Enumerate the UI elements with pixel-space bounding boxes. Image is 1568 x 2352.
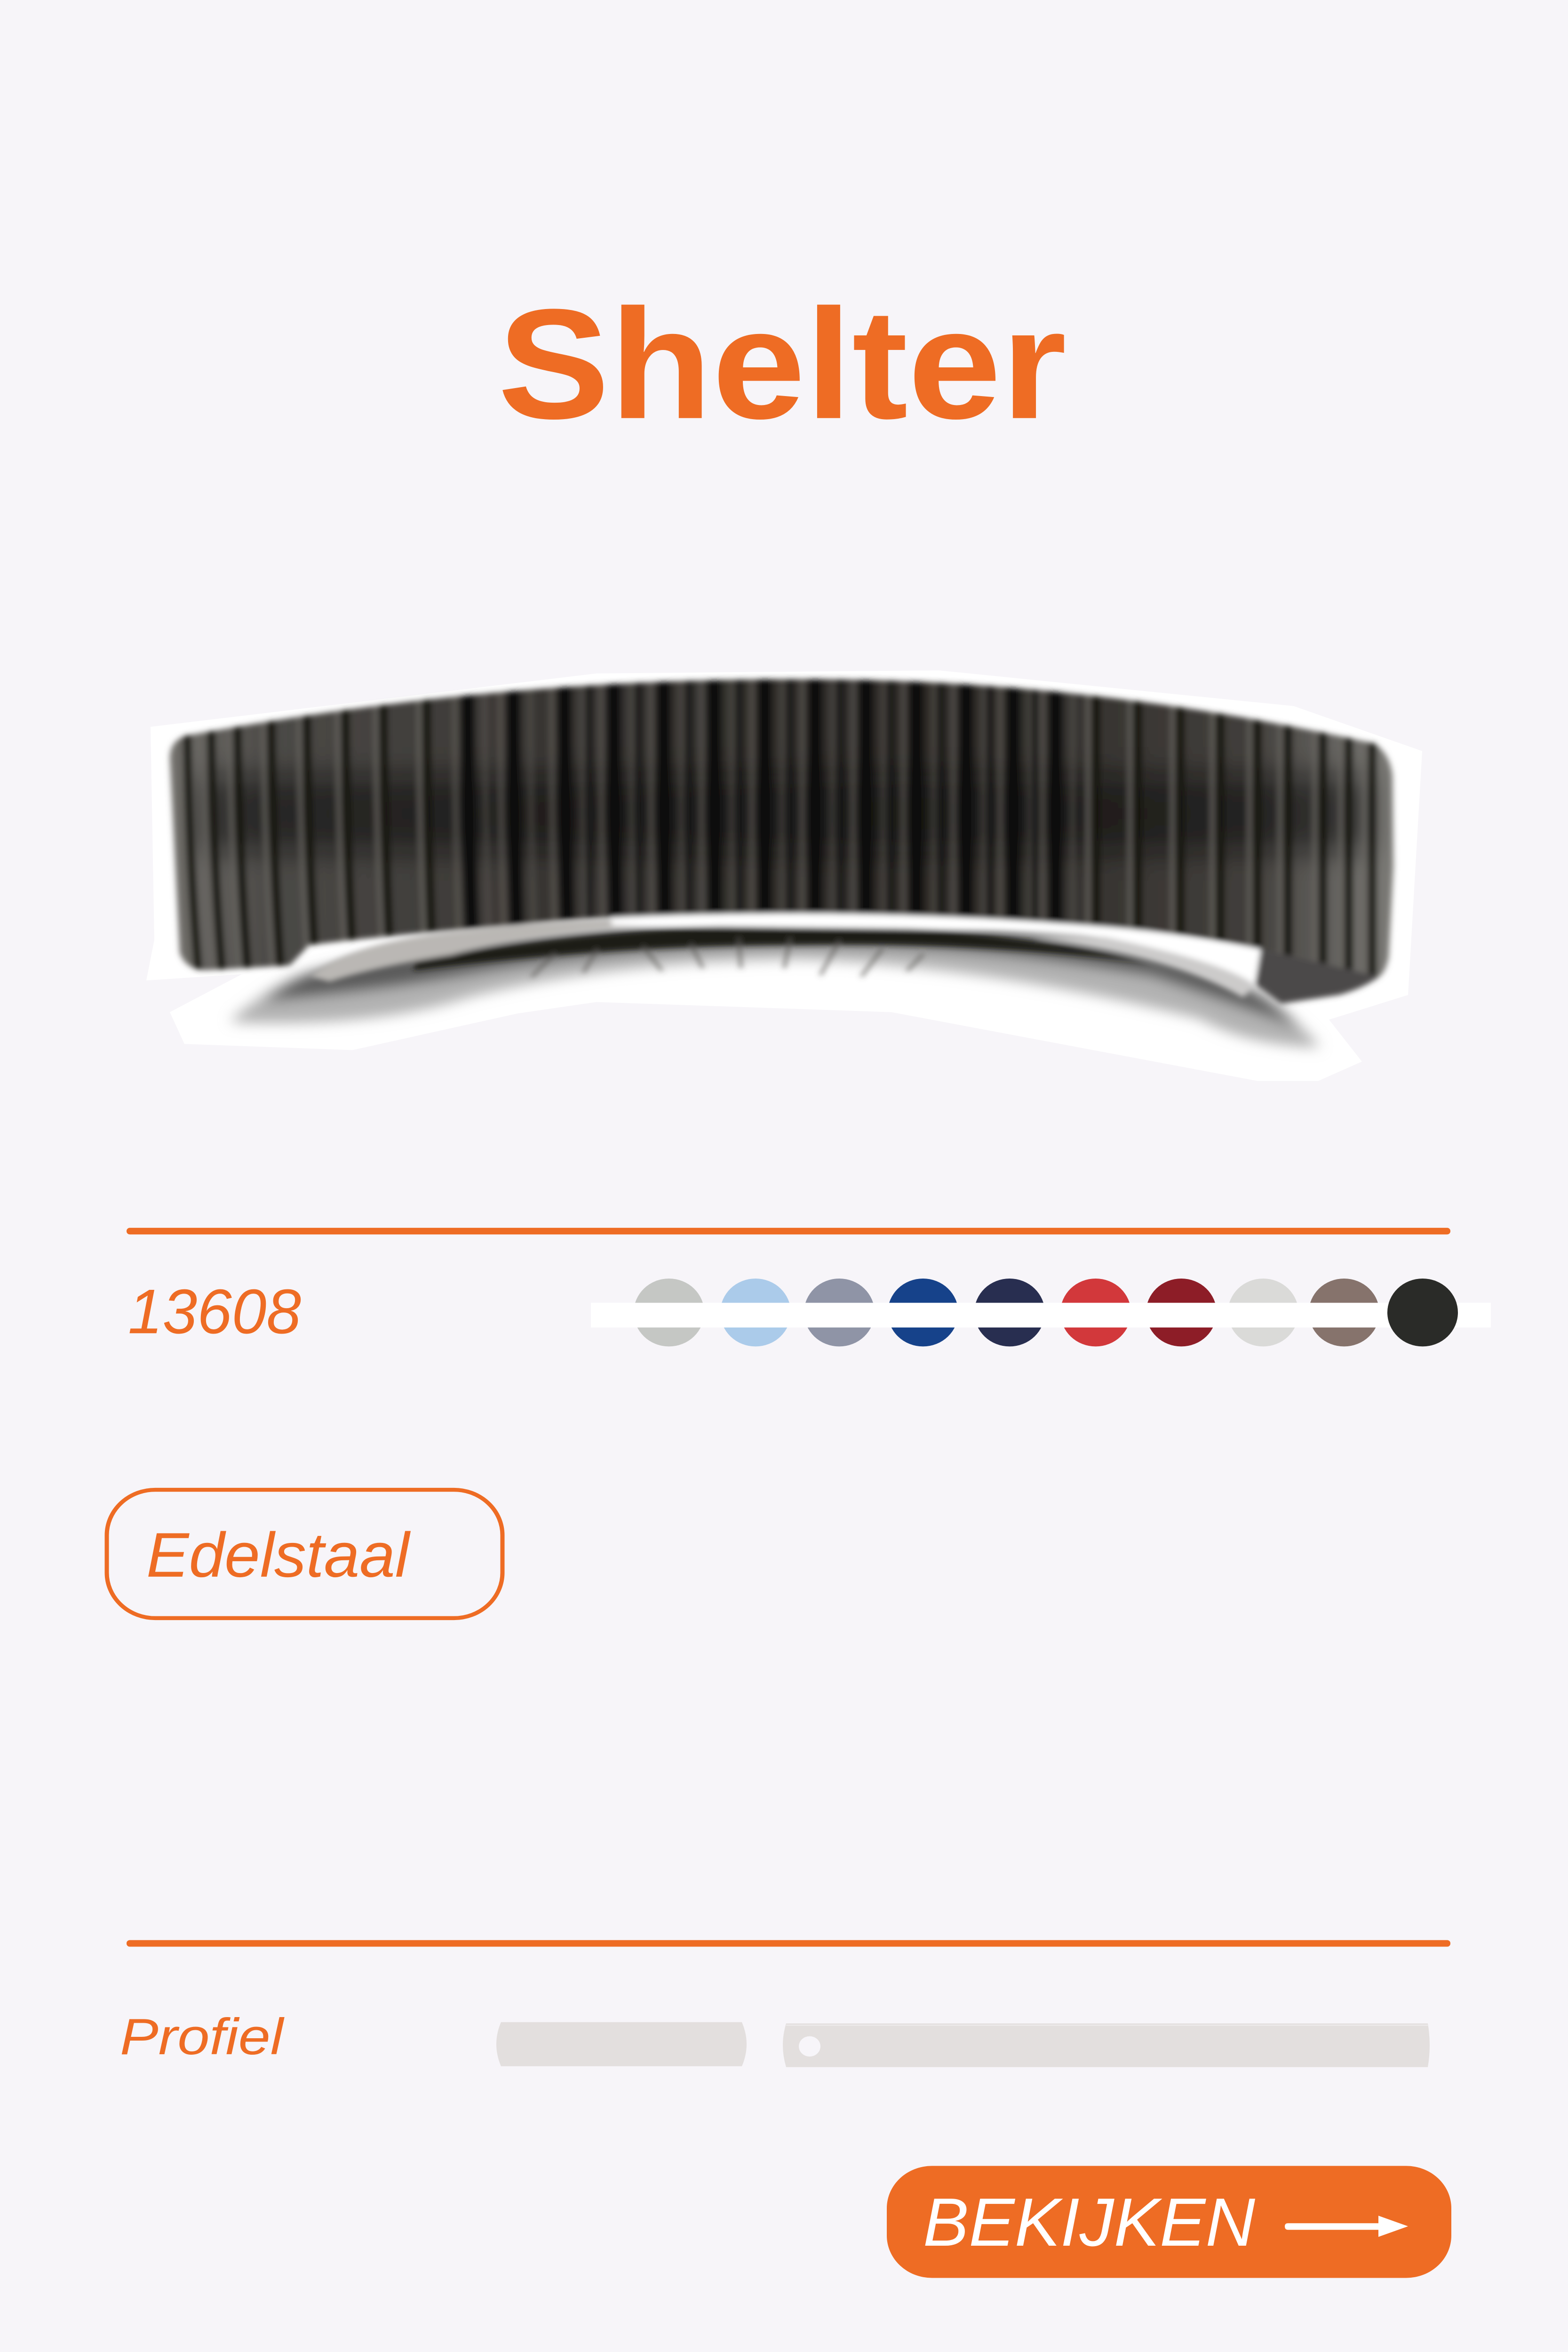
top divider: [127, 1228, 1450, 1234]
product image: stainless steel watch band: [141, 661, 1422, 1081]
material tag: Edelstaal: [146, 1520, 411, 1590]
material tag: [107, 1490, 502, 1618]
button: bekijken: [887, 2166, 1451, 2278]
icon: arrow: [1285, 2216, 1408, 2237]
profile label: Profiel: [120, 2008, 285, 2065]
product card: [104, 305, 1491, 2278]
profile placeholder: short: [496, 2022, 747, 2066]
profile placeholder: long with dot: [783, 2024, 1430, 2067]
colour swatches: [591, 1279, 1491, 1346]
bottom divider: [127, 1940, 1450, 1947]
button: bekijken: BEKIJKEN: [923, 2184, 1255, 2260]
title: Shelter: [498, 277, 1067, 451]
article number: 13608: [128, 1277, 301, 1347]
